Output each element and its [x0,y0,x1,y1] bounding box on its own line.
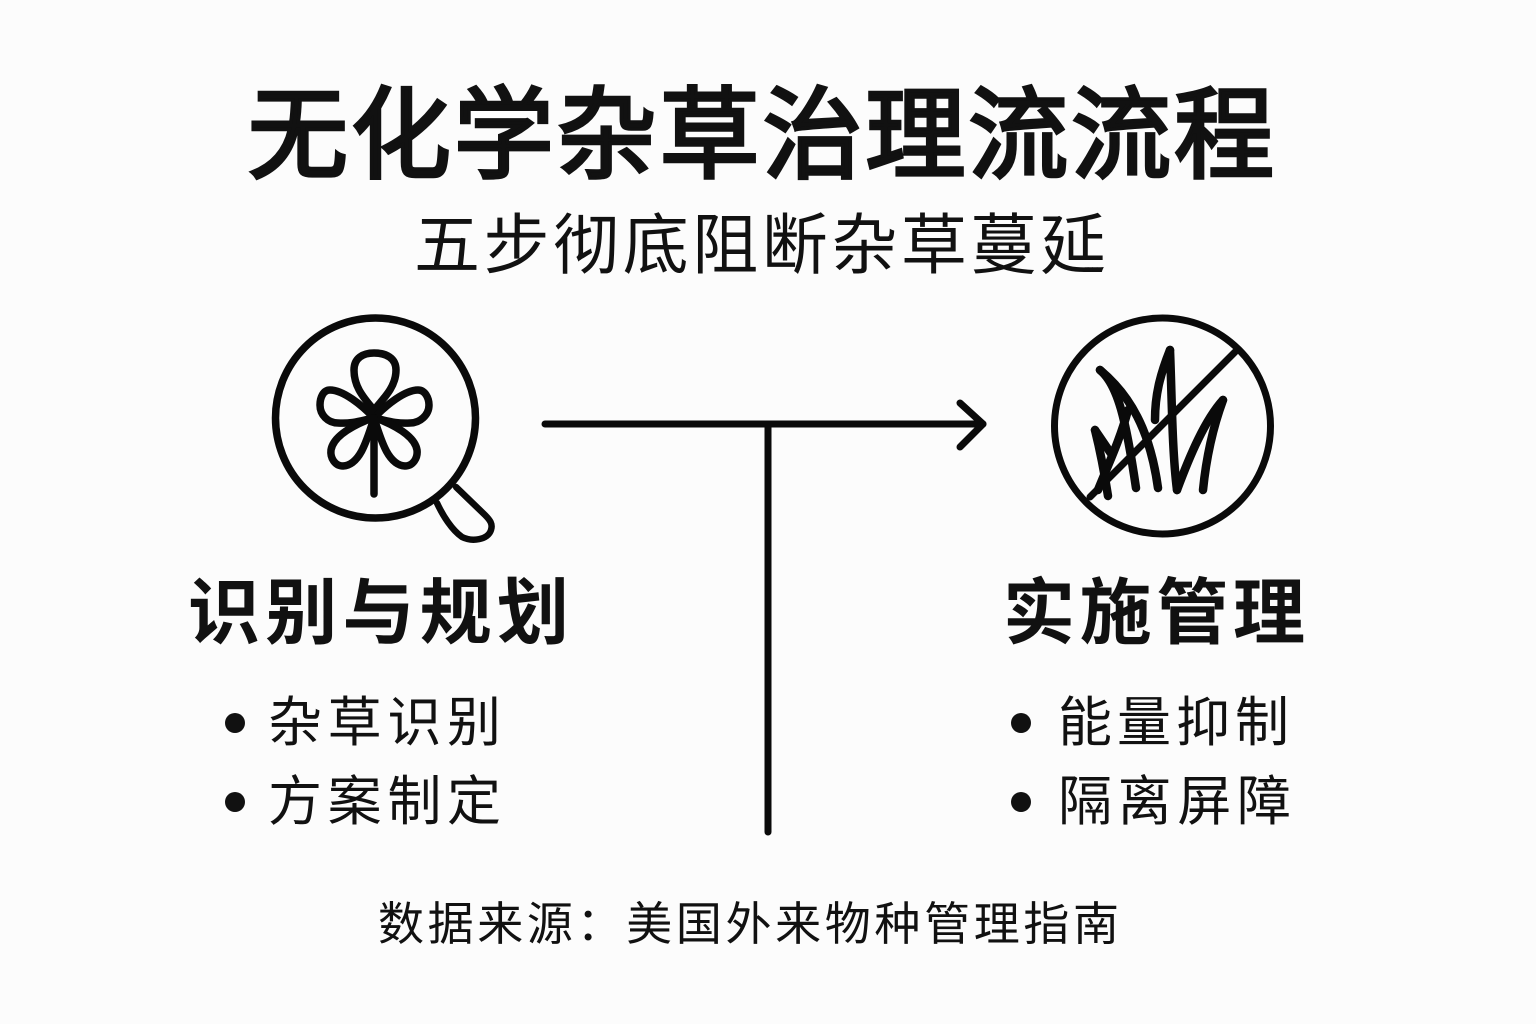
bullet list: right [1011,693,1291,832]
bullet list: left: 杂草识别 [268,693,501,753]
footer source: 数据来源：美国外来物种管理指南 [378,898,1119,950]
bullet list: left: 方案制定 [268,772,501,832]
connector arrow [545,403,983,832]
heading: identification and planning: 识别与规划 [188,574,569,654]
heading: implementation and management: 实施管理 [1003,574,1305,654]
icon: magnifying glass with leaf [276,318,492,540]
icon: crossed-out grass [1054,318,1270,534]
subtitle: 五步彻底阻断杂草蔓延 [414,208,1106,282]
bullet list: right: 能量抑制 [1058,693,1289,753]
title: 无化学杂草治理流流程 [248,80,1274,192]
bullet list: left [225,693,501,832]
bullet list: right: 隔离屏障 [1058,772,1291,832]
